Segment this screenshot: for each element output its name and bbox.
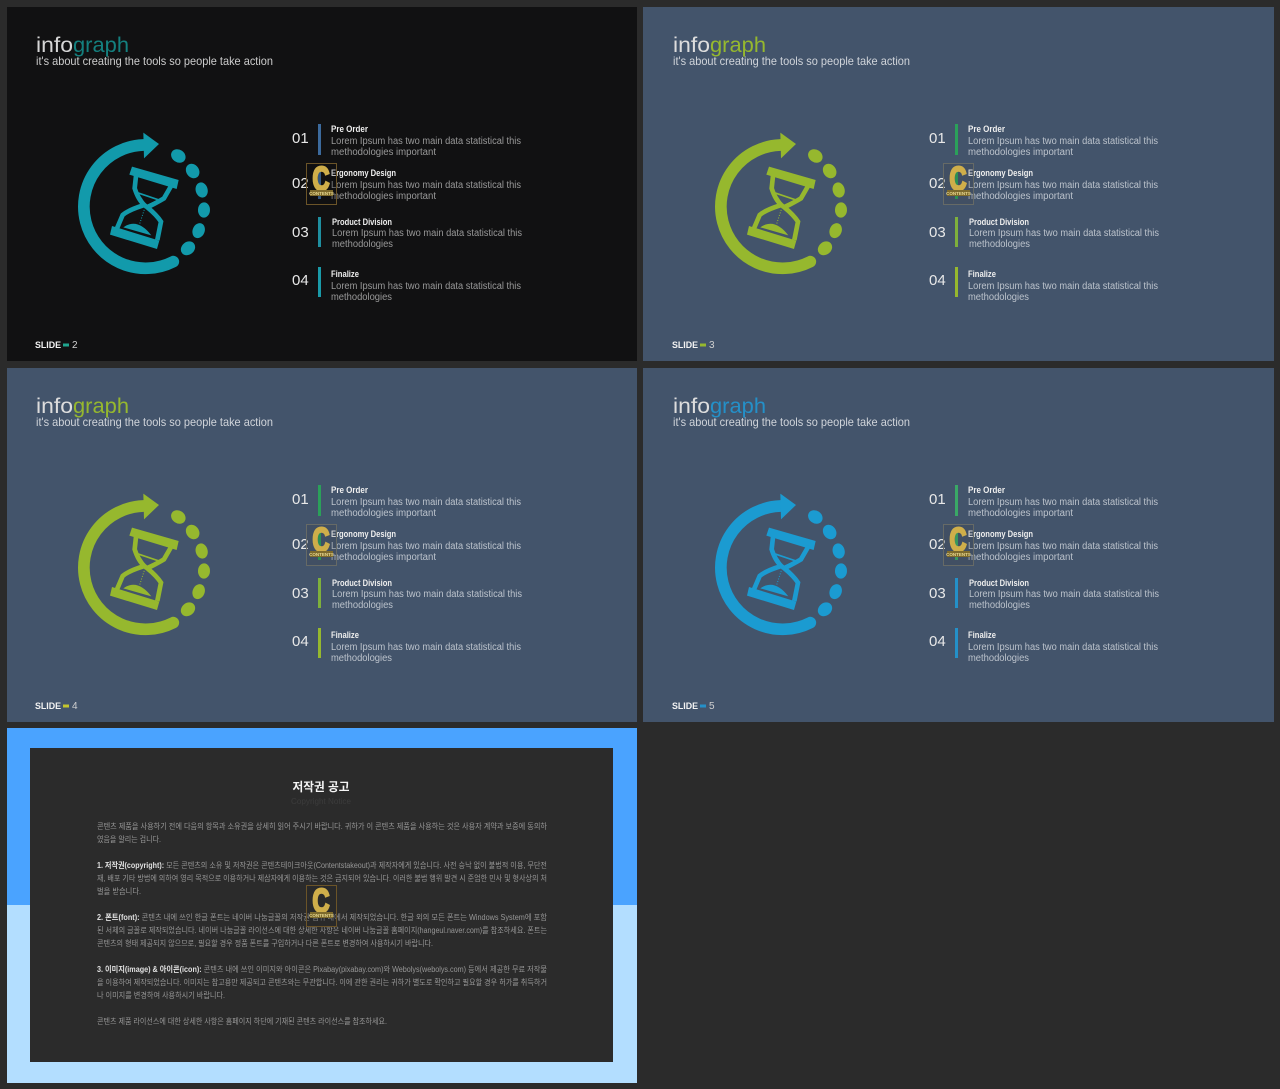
list item 01: Lorem Ipsum has two main data statistical this [968, 497, 1158, 508]
watermark logo [306, 160, 336, 204]
list item 02: methodologies important [331, 552, 436, 563]
text block: font clause [97, 912, 548, 948]
list item 03: Product Division [969, 217, 1029, 227]
list item 04: Lorem Ipsum has two main data statistical this [968, 281, 1158, 292]
watermark logo: C [312, 521, 330, 558]
list item 02: 02 [292, 175, 309, 192]
list item 02: Lorem Ipsum has two main data statistical this [331, 541, 521, 552]
title: infograph: graph [73, 34, 129, 57]
list item 01: methodologies important [331, 147, 436, 158]
panel: slide 2 black teal [7, 7, 637, 361]
list item 04: Finalize [968, 269, 996, 279]
list item 03: Lorem Ipsum has two main data statistical this [332, 228, 522, 239]
panel: slide 3 slate lime [643, 7, 1274, 361]
subtitle: it's about creating the tools so people take action [673, 54, 910, 68]
list item 04 [292, 267, 521, 303]
list item 02: methodologies important [968, 191, 1073, 202]
list item 03: Product Division [332, 217, 392, 227]
watermark logo: CONTENTS [309, 913, 334, 918]
list item 01: 01 [292, 491, 309, 508]
list item 01: methodologies important [331, 508, 436, 519]
text block: copyright clause: 1. 저작권(copyright): 모든 콘텐츠의 소유 및 저작권은 콘텐츠테이크아웃(Contentstakeout)과 제작자에게 있습니다. 사전 승낙 없이 불법적 이용, 무단전 [97, 860, 547, 870]
list item 03 [929, 578, 1159, 611]
title: infograph: graph [710, 34, 766, 57]
watermark logo: C [312, 160, 330, 197]
footer: slide number [35, 340, 78, 351]
list item 01 [292, 124, 521, 158]
list item 04: methodologies [331, 292, 392, 303]
list item 04: Lorem Ipsum has two main data statistical this [331, 642, 521, 653]
panel: copyright notice slide [7, 728, 637, 1083]
text block: intro: 였음을 알리는 겁니다. [97, 834, 161, 844]
list item 03: Lorem Ipsum has two main data statistical this [969, 228, 1159, 239]
title: infograph: info [36, 395, 73, 418]
list item 01 [929, 485, 1158, 519]
list item 01: Lorem Ipsum has two main data statistical this [968, 136, 1158, 147]
list item 04: 04 [929, 633, 946, 650]
title: infograph [36, 34, 129, 57]
subtitle: it's about creating the tools so people take action [36, 415, 273, 429]
list item 03 [292, 217, 522, 250]
list item 01: Pre Order [968, 124, 1005, 134]
title: infograph: info [673, 395, 710, 418]
text block: license note: 콘텐츠 제품 라이선스에 대한 상세한 사항은 홈페이지 하단에 기재된 콘텐츠 라이선스를 참조하세요. [97, 1016, 387, 1026]
list item 03: Lorem Ipsum has two main data statistical this [969, 589, 1159, 600]
list item 04: Lorem Ipsum has two main data statistical this [968, 642, 1158, 653]
text block: intro [97, 821, 548, 844]
list item 03: 03 [929, 585, 946, 602]
list item 02: 02 [292, 536, 309, 553]
watermark logo: C [950, 521, 966, 558]
list item 04 [292, 628, 521, 664]
heading: copyright notice: 저작권 공고 [292, 779, 350, 794]
list item 04: Finalize [968, 630, 996, 640]
list item 01: Pre Order [968, 485, 1005, 495]
list item 03: methodologies [332, 239, 393, 250]
icon: hourglass with circular arrow [721, 133, 847, 268]
title: infograph: graph [710, 395, 766, 418]
watermark logo [944, 160, 974, 204]
list item 01: Pre Order [331, 124, 368, 134]
list item 03: methodologies [969, 600, 1030, 611]
list item 02: methodologies important [331, 191, 436, 202]
watermark logo [306, 521, 336, 566]
footer: slide number [672, 340, 715, 351]
text block: image and icon clause: 나 이미지를 변경하여 사용하시기 바랍니다. [97, 990, 225, 1000]
footer: slide number: 2 [72, 340, 78, 351]
list item 01: 01 [929, 491, 946, 508]
list item 04: Finalize [331, 269, 359, 279]
list item 02 [929, 529, 1158, 563]
list item 03: Product Division [332, 578, 392, 588]
text block: copyright clause: 벌을 받습니다. [97, 886, 141, 896]
list item 04: 04 [929, 272, 946, 289]
panel: slide 5 slate blue [643, 368, 1274, 722]
icon: hourglass with circular arrow [84, 494, 210, 629]
list item 02: Ergonomy Design [968, 168, 1033, 178]
title: infograph [673, 34, 766, 57]
list item 01 [929, 124, 1158, 158]
text block: image and icon clause: 3. 이미지(image) & 아이콘(icon): 콘텐츠 내에 쓰인 이미지와 아이콘은 Pixabay(pixabay.com)와 Webolys(webolys.com) 등에서 제공한 무료 저작물 [97, 964, 547, 974]
footer: slide number: 4 [72, 701, 78, 712]
icon: hourglass with circular arrow [721, 494, 847, 629]
title: infograph [673, 395, 766, 418]
watermark logo: CONTENTS [946, 191, 971, 196]
list item 01: methodologies important [968, 508, 1073, 519]
list item 02: Ergonomy Design [968, 529, 1033, 539]
list item 01 [292, 485, 521, 519]
list item 02 [929, 168, 1158, 202]
text block: image and icon clause [97, 964, 547, 1000]
list item 01: Lorem Ipsum has two main data statistical this [331, 136, 521, 147]
watermark logo [944, 521, 974, 566]
text block: font clause: 콘텐츠의 형태 제공되지 않으므로, 필요할 경우 정품 폰트를 구입하거나 다른 폰트로 변경하여 사용하시기 바랍니다. [97, 938, 433, 948]
text block: copyright clause [97, 860, 547, 896]
watermark logo: CONTENTS [309, 552, 334, 557]
list item 02: Lorem Ipsum has two main data statistical this [968, 180, 1158, 191]
list item 04: Lorem Ipsum has two main data statistical this [331, 281, 521, 292]
title: infograph: info [36, 34, 73, 57]
panel: slide 4 slate lime [7, 368, 637, 722]
footer: slide number: SLIDE [672, 701, 698, 711]
footer: slide number: SLIDE [35, 340, 61, 350]
list item 03: methodologies [969, 239, 1030, 250]
list item 01: methodologies important [968, 147, 1073, 158]
list item 02: methodologies important [968, 552, 1073, 563]
text block: font clause: 된 서체의 글꼴로 제작되었습니다. 네이버 나눔글꼴 라이선스에 대한 상세한 사항은 네이버 나눔글꼴 홈페이지(hangeul.naver.com)를 참조하세요. 폰트는 [97, 925, 547, 935]
subtitle: it's about creating the tools so people take action [36, 54, 273, 68]
list item 04: methodologies [968, 292, 1029, 303]
list item 04: 04 [292, 272, 309, 289]
list item 02: Ergonomy Design [331, 168, 396, 178]
list item 03: methodologies [332, 600, 393, 611]
text block: copyright clause: 재, 배포 기타 방법에 의하여 영리 목적으로 이용하거나 제삼자에게 이용하는 것은 금지되어 있습니다. 이러한 불법 행위 발견 시 준엄한 민사 및 형사상의 처 [97, 873, 547, 883]
list item 02: Ergonomy Design [331, 529, 396, 539]
list item 03: 03 [292, 224, 309, 241]
footer: slide number: 3 [709, 340, 715, 351]
list item 03 [929, 217, 1159, 250]
watermark logo: C [950, 160, 966, 197]
text block: intro: 콘텐츠 제품을 사용하기 전에 다음의 항목과 소유권을 상세히 읽어 주시기 바랍니다. 귀하가 이 콘텐츠 제품을 사용하는 것은 사용자 계약과 보증에 동의하 [97, 821, 548, 831]
icon: hourglass with circular arrow [84, 133, 210, 268]
footer: slide number: 5 [709, 701, 715, 712]
list item 02 [292, 529, 521, 563]
list item 04: 04 [292, 633, 309, 650]
watermark logo: C [312, 882, 330, 919]
list item 01: Pre Order [331, 485, 368, 495]
list item 03 [292, 578, 522, 611]
list item 03: 03 [929, 224, 946, 241]
subheading: Copyright Notice: Copyright Notice [291, 797, 352, 806]
list item 04 [929, 628, 1158, 664]
title: infograph: info [673, 34, 710, 57]
text block: font clause: 2. 폰트(font): 콘텐츠 내에 쓰인 한글 폰트는 네이버 나눔글꼴의 저작권 범위 내에서 제작되었습니다. 한글 외의 모든 폰트는 Windows System에 포함 [97, 912, 548, 922]
list item 04 [929, 267, 1158, 303]
list item 02 [292, 168, 521, 202]
list item 03: Lorem Ipsum has two main data statistical this [332, 589, 522, 600]
list item 02: 02 [929, 536, 946, 553]
list item 01: 01 [929, 130, 946, 147]
list item 01: Lorem Ipsum has two main data statistical this [331, 497, 521, 508]
list item 04: methodologies [968, 653, 1029, 664]
watermark logo: CONTENTS [946, 552, 971, 557]
watermark logo: CONTENTS [309, 191, 334, 196]
list item 02: Lorem Ipsum has two main data statistical this [968, 541, 1158, 552]
title: infograph [36, 395, 129, 418]
list item 02: Lorem Ipsum has two main data statistical this [331, 180, 521, 191]
list item 03: Product Division [969, 578, 1029, 588]
list item 04: methodologies [331, 653, 392, 664]
list item 01: 01 [292, 130, 309, 147]
text block: image and icon clause: 을 이용하여 제작되었습니다. 이미지는 참고용만 제공되고 콘텐츠와는 무관합니다. 이에 관한 권리는 귀하가 별도로 확인하고 필요할 경우 허가를 취득하거 [97, 977, 547, 987]
footer: slide number: SLIDE [35, 701, 61, 711]
footer: slide number: SLIDE [672, 340, 698, 350]
footer: slide number [672, 701, 715, 712]
watermark logo [306, 882, 336, 926]
list item 03: 03 [292, 585, 309, 602]
footer: slide number [35, 701, 78, 712]
list item 04: Finalize [331, 630, 359, 640]
title: infograph: graph [73, 395, 129, 418]
subtitle: it's about creating the tools so people take action [673, 415, 910, 429]
list item 02: 02 [929, 175, 946, 192]
